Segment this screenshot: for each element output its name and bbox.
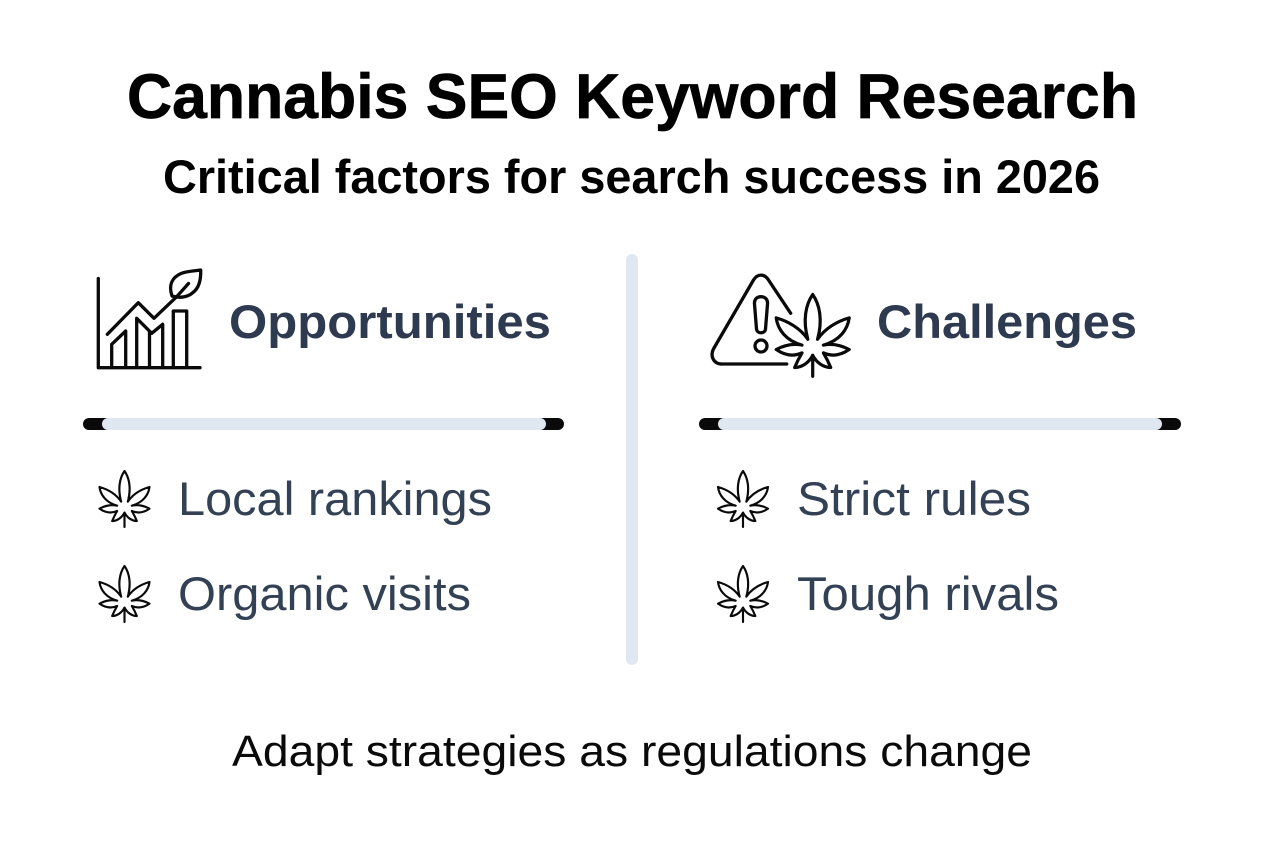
item text: Strict rules: [797, 472, 1031, 525]
panel: opportunities: [83, 270, 564, 622]
title: Cannabis SEO Keyword Research: [127, 62, 1138, 132]
subtitle: Critical factors for search success in 2026: [163, 150, 1100, 203]
panel: challenges: [699, 275, 1181, 622]
footer text: Adapt strategies as regulations change: [232, 727, 1032, 776]
center divider: [626, 254, 638, 665]
list item: tough rivals: [718, 566, 1059, 622]
icon: cannabis leaf: [100, 471, 149, 527]
icon: cannabis leaf: [718, 471, 768, 527]
icon: growth chart with leaf: [98, 270, 201, 368]
divider bar: opportunities: [83, 418, 564, 430]
icon: warning triangle with leaf: [712, 275, 849, 376]
icon: cannabis leaf: [718, 566, 768, 622]
heading: opportunities: Opportunities: [229, 295, 551, 348]
item text: Tough rivals: [797, 567, 1059, 620]
list item: strict rules: [718, 471, 1031, 527]
icon: cannabis leaf: [100, 566, 149, 622]
list item: organic visits: [100, 566, 471, 622]
list item: local rankings: [100, 471, 492, 527]
divider bar: challenges: [699, 418, 1181, 430]
item text: Organic visits: [178, 567, 471, 620]
item text: Local rankings: [178, 472, 492, 525]
heading: challenges: Challenges: [877, 295, 1137, 348]
